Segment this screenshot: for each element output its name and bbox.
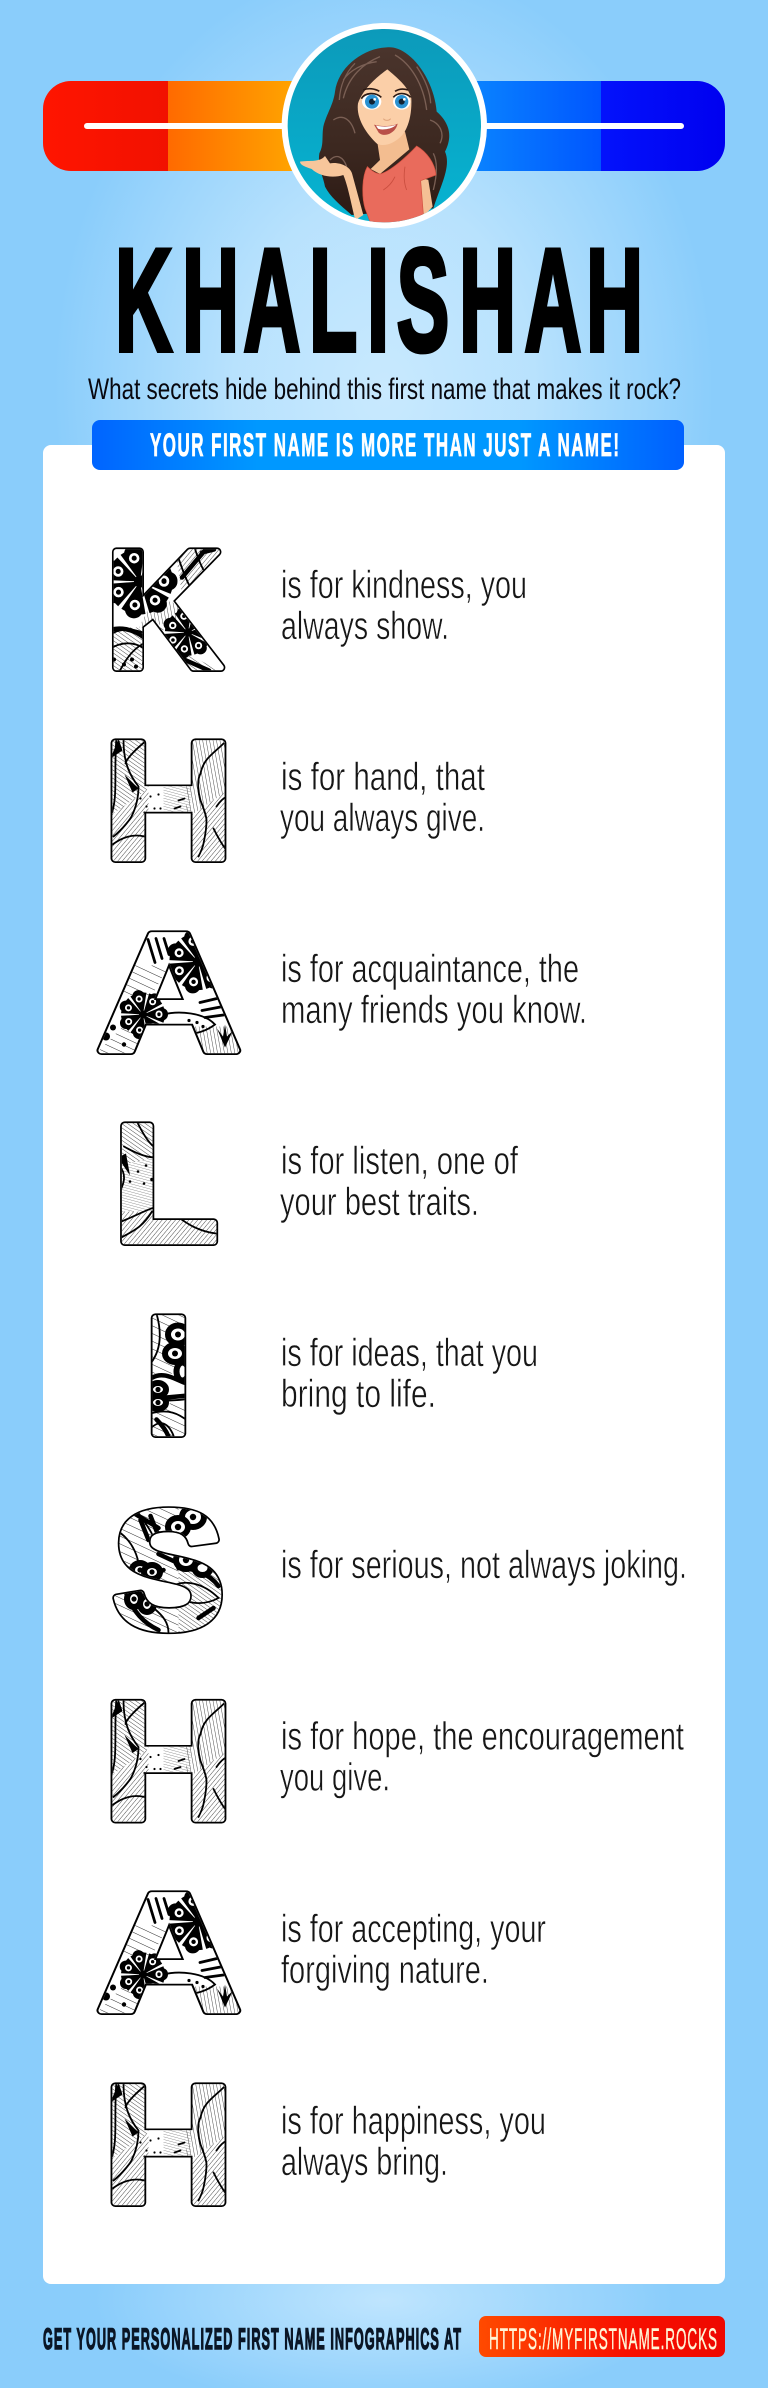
text: A acquaintance: is for acquaintance, the xyxy=(281,948,579,991)
text: K: is for kindness, you xyxy=(281,564,527,607)
flower xyxy=(112,553,168,610)
panel: white content card xyxy=(43,445,725,2284)
text: I xyxy=(281,1332,538,1416)
banner: YOUR FIRST NAME IS MORE THAN JUST A NAME! xyxy=(150,429,619,463)
banner xyxy=(92,420,684,470)
letter A illustration: A xyxy=(97,1859,241,2047)
right arm xyxy=(418,179,433,216)
text: A accepting xyxy=(281,1908,546,1992)
letter I illustration: I xyxy=(144,1282,193,1469)
letter A illustration: A xyxy=(97,899,241,1087)
text: A acquaintance: many friends you know. xyxy=(281,989,587,1032)
letter I illustration: I xyxy=(144,1282,193,1469)
letter H illustration: H xyxy=(103,1667,234,1855)
letter H illustration: H xyxy=(103,706,234,894)
left arm and hand xyxy=(300,156,363,220)
text: A acquaintance xyxy=(281,948,587,1032)
text: K xyxy=(281,564,527,648)
text: I: is for ideas, that you xyxy=(281,1332,538,1375)
footer url button: HTTPS://MYFIRSTNAME.ROCKS xyxy=(489,2322,717,2355)
letter H illustration: H xyxy=(103,706,234,894)
letter K illustration: K xyxy=(105,516,223,703)
flower xyxy=(168,613,208,652)
letter L illustration: L xyxy=(113,1091,219,1278)
letter L illustration xyxy=(120,1121,218,1246)
text: H hand: you always give. xyxy=(280,797,485,840)
text: H happiness: is for happiness, you xyxy=(281,2100,546,2143)
text: H hand xyxy=(280,756,485,840)
nose and mouth xyxy=(383,119,391,120)
flower xyxy=(124,1956,162,1994)
text: L xyxy=(280,1140,518,1224)
flower xyxy=(124,996,162,1034)
neck xyxy=(371,132,409,174)
text: H hope: you give. xyxy=(280,1756,390,1800)
header gradient bar xyxy=(43,81,725,171)
shirt xyxy=(363,146,436,223)
letter A illustration: A xyxy=(97,1859,241,2047)
text: H hope xyxy=(280,1716,684,1800)
text: H hand: is for hand, that xyxy=(281,756,485,799)
title: KHALISHAH xyxy=(115,219,643,382)
letter S illustration: S xyxy=(112,1476,225,1664)
letter S illustration xyxy=(112,1506,223,1634)
letter I illustration xyxy=(150,1313,186,1438)
letter K illustration xyxy=(112,547,226,672)
letter H illustration: H xyxy=(103,2050,234,2238)
face xyxy=(358,69,411,145)
text: I: bring to life. xyxy=(281,1373,436,1416)
footer call to action: GET YOUR PERSONALIZED FIRST NAME INFOGRAPHICS AT xyxy=(43,2322,461,2355)
letter K illustration: K xyxy=(105,516,223,703)
text: L: your best traits. xyxy=(280,1181,479,1224)
text: H happiness: always bring. xyxy=(281,2141,448,2184)
text: H happiness xyxy=(281,2100,546,2184)
letter H illustration: H xyxy=(103,2050,234,2238)
text: L: is for listen, one of xyxy=(281,1140,518,1183)
letter H illustration xyxy=(110,738,226,863)
avatar: woman in circle xyxy=(282,23,487,228)
flower xyxy=(173,937,223,986)
letter H illustration: H xyxy=(103,1667,234,1855)
letter H illustration xyxy=(110,1698,226,1824)
letter S illustration: S xyxy=(112,1476,225,1664)
letter H illustration xyxy=(110,2082,226,2207)
text: A accepting: forgiving nature. xyxy=(281,1949,489,1992)
letter A illustration xyxy=(96,930,242,1055)
text: K: always show. xyxy=(281,605,449,648)
eyes xyxy=(362,94,381,110)
text: A accepting: is for accepting, your xyxy=(281,1908,546,1951)
letter A illustration: A xyxy=(97,899,241,1087)
flower xyxy=(173,1897,223,1946)
letter L illustration: L xyxy=(113,1091,219,1278)
letter A illustration xyxy=(96,1890,242,2015)
